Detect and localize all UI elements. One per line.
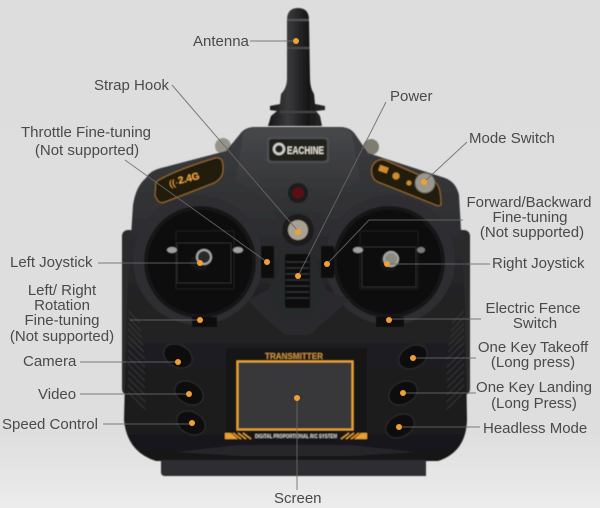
centre console with slider [248,250,350,335]
label: Electric Fence Switch: Switch [513,315,557,332]
label: Power: Power [390,88,433,105]
trim switches [192,246,404,327]
label: Antenna: Antenna [193,33,250,50]
strap hook and power knobs [215,138,379,155]
label: Forward/Backward Fine-tuning: Fine-tuning [492,209,568,226]
label: Forward/Backward Fine-tuning: Forward/Backward [466,194,592,211]
left buttons [160,339,209,440]
right buttons [382,340,431,443]
mode switch knob [415,173,435,193]
mode switch badge [372,160,441,206]
label: Left/Right Rotation Fine-tuning: (Not supported) [10,328,114,345]
label: Video: Video [38,386,76,403]
logo plate [267,137,329,163]
label: Throttle Fine-tuning: Throttle Fine-tuning [21,124,151,141]
screen panel [225,348,367,442]
label: Electric Fence Switch: Electric Fence [485,300,581,317]
2.4G badge [155,158,223,203]
screen panel: DIGITAL PROPORTIONAL R/C SYSTEM [255,434,337,440]
logo plate: EACHINE [287,145,324,157]
label: Left/Right Rotation Fine-tuning: Left/ Right [28,282,97,299]
red indicator LED [288,183,308,203]
label: One Key Takeoff: One Key Takeoff [478,339,589,356]
label: One Key Landing: One Key Landing [476,379,592,396]
side grips [122,230,470,395]
label: One Key Landing: (Long Press) [491,395,577,412]
antenna [268,8,325,126]
base stand [161,445,426,476]
2.4G badge: 2.4G [177,171,201,187]
screen panel: TRANSMITTER [265,352,323,361]
right joystick well [325,195,455,325]
top centre housing [236,128,360,218]
label: Left/Right Rotation Fine-tuning: Fine-tuning [24,312,100,329]
label: Strap Hook: Strap Hook [94,77,170,94]
label: Screen: Screen [274,490,322,507]
label: Right Joystick: Right Joystick [492,255,585,272]
centre knob [282,214,314,246]
orange marker dots [175,38,427,430]
left joystick well [133,195,263,325]
transmitter body [122,8,470,476]
label: Forward/Backward Fine-tuning: (Not supported) [480,224,584,241]
label: Throttle Fine-tuning: (Not supported) [35,142,139,159]
speaker vents [128,311,464,409]
label: Left Joystick: Left Joystick [10,254,93,271]
label: One Key Takeoff: (Long press) [491,354,575,371]
leader lines [80,41,490,490]
2.4G badge: ((· [168,177,179,189]
label: Camera: Camera [23,353,77,370]
label: Left/Right Rotation Fine-tuning: Rotation [34,297,90,314]
main casing [124,127,467,461]
label: Speed Control: Speed Control [2,416,98,433]
label: Headless Mode: Headless Mode [483,420,587,437]
label: Mode Switch: Mode Switch [469,130,555,147]
